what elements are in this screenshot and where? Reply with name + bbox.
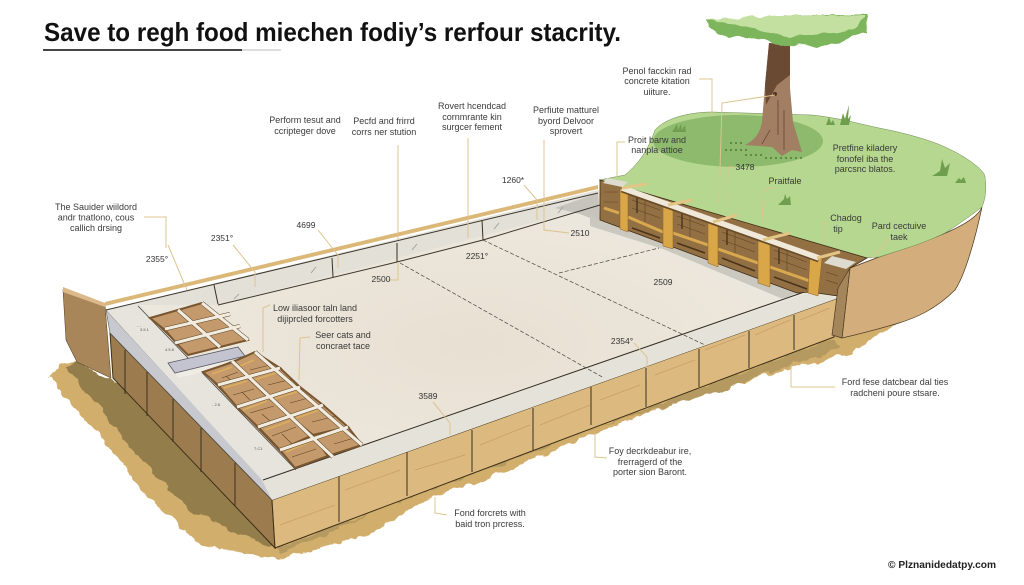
wood form shadow [590, 215, 797, 299]
label: perform note: Perform tesut and [269, 115, 341, 125]
floor control joints [400, 240, 705, 378]
label: chadog: Chadog [830, 213, 862, 223]
label: tank note: taek [890, 232, 908, 242]
label: mature note: Perfiute matturel [533, 105, 599, 115]
small stamped marks on rim [137, 323, 263, 451]
grass shade [653, 115, 823, 167]
label: corner note: corrs ner stution [352, 127, 416, 137]
upper rebar grid [150, 303, 248, 355]
label: surface note: surgcer fement [442, 122, 503, 132]
dimension numbers: 2509 [654, 277, 673, 287]
tree canopy [705, 15, 868, 47]
dimension numbers: 2354° [611, 336, 633, 346]
steel channel beam [168, 347, 248, 378]
left end wall [63, 290, 111, 378]
concrete slab [106, 190, 838, 500]
grass lawn [599, 112, 986, 258]
dimension numbers: 2500 [372, 274, 391, 284]
label: concrete base note: concraet tace [316, 341, 370, 351]
grass tufts [672, 105, 966, 205]
sand base [50, 322, 899, 559]
dimension numbers: 2251° [466, 251, 488, 261]
label: mid footing note: Foy decrkdeabur ire, [609, 446, 691, 456]
front wall face [272, 298, 838, 548]
form posts [620, 189, 822, 296]
form beams [622, 189, 819, 259]
soil bank [842, 207, 982, 338]
small stamped marks on rim: 7.C1 [254, 446, 263, 451]
label: lawn note: parcsnc blatos. [835, 164, 895, 174]
label: mature note: sprovert [550, 126, 583, 136]
label: bottom footing note: baid tron prcress. [455, 519, 525, 529]
tree [705, 15, 868, 158]
label: chadog: tip [833, 224, 843, 234]
fallen leaves [725, 143, 805, 158]
label: lawn note: fonofel iba the [837, 154, 893, 164]
form slots [632, 228, 807, 289]
label: right footing note: Ford fese datcbear dal ties [842, 377, 949, 387]
dimension numbers: 4699 [297, 220, 316, 230]
dimension numbers [146, 162, 755, 401]
small stamped marks on rim: - - [137, 323, 141, 328]
label: right footing note: radcheni poure stsare. [850, 388, 940, 398]
tree trunk [745, 43, 802, 156]
label: tank note: Pard cectuive [872, 221, 926, 231]
label: bottom footing note: Fond forcrets with [454, 508, 526, 518]
label: rebar note: Low iliasoor taln land [273, 303, 357, 313]
dimension numbers: 2510 [571, 228, 590, 238]
gray bevel [106, 310, 275, 500]
label: lawn note: Pretfine kiladery [833, 143, 898, 153]
label: left wall note: callich drsing [70, 223, 122, 233]
wooden formwork [600, 178, 867, 296]
label: formwork note: Proit barw and [628, 135, 686, 145]
dimension numbers: 2355° [146, 254, 168, 264]
label: perform note: ccripteger dove [274, 126, 336, 136]
cell gold edges and rebar ties [212, 360, 346, 452]
left rim [106, 304, 296, 481]
label: concrete note: Penol facckin rad [622, 66, 692, 76]
left wall face [110, 333, 275, 548]
dimension numbers: 1260* [502, 175, 525, 185]
label: left wall note: andr tnatlono, cous [58, 212, 135, 222]
label: surface note: Rovert hcendcad [438, 101, 506, 111]
label: mature note: byord Delvoor [538, 116, 594, 126]
small stamped marks on rim: 3.5 1 [140, 327, 150, 332]
lower rebar grid [203, 352, 362, 468]
small stamped marks on rim: - 2.5 [212, 402, 221, 407]
copyright: © Plznanidedatpy.com [888, 560, 996, 571]
dimension numbers: 3478 [736, 162, 755, 172]
label: grass note: Praitfale [768, 176, 802, 186]
label: surface note: cornmrante kin [442, 112, 502, 122]
label: concrete note: uiiture. [643, 87, 671, 97]
front rim [262, 292, 838, 500]
dimension numbers: 3589 [419, 391, 438, 401]
right corner post [832, 268, 850, 338]
label: mid footing note: frerragerd of the [618, 457, 682, 467]
form ledgers [604, 208, 810, 281]
label: corner note: Pecfd and frirrd [353, 116, 415, 126]
label: concrete base note: Seer cats and [315, 330, 371, 340]
form bricks [604, 192, 838, 284]
label: rebar note: dijiprcled forcotters [277, 314, 353, 324]
title: Save to regh food miechen fodiy’s rerfour stacrity. [44, 17, 621, 47]
leader lines [144, 79, 890, 515]
label: left wall note: The Sauider wiildord [55, 202, 137, 212]
dimension numbers: 2351° [211, 233, 233, 243]
small stamped marks on rim: 4.5 8 [165, 347, 175, 352]
label: formwork note: nanpla attioe [631, 145, 683, 155]
back curb [105, 185, 600, 310]
label: mid footing note: porter sion Baront. [613, 467, 687, 477]
label: concrete note: concrete kitation [624, 76, 690, 86]
